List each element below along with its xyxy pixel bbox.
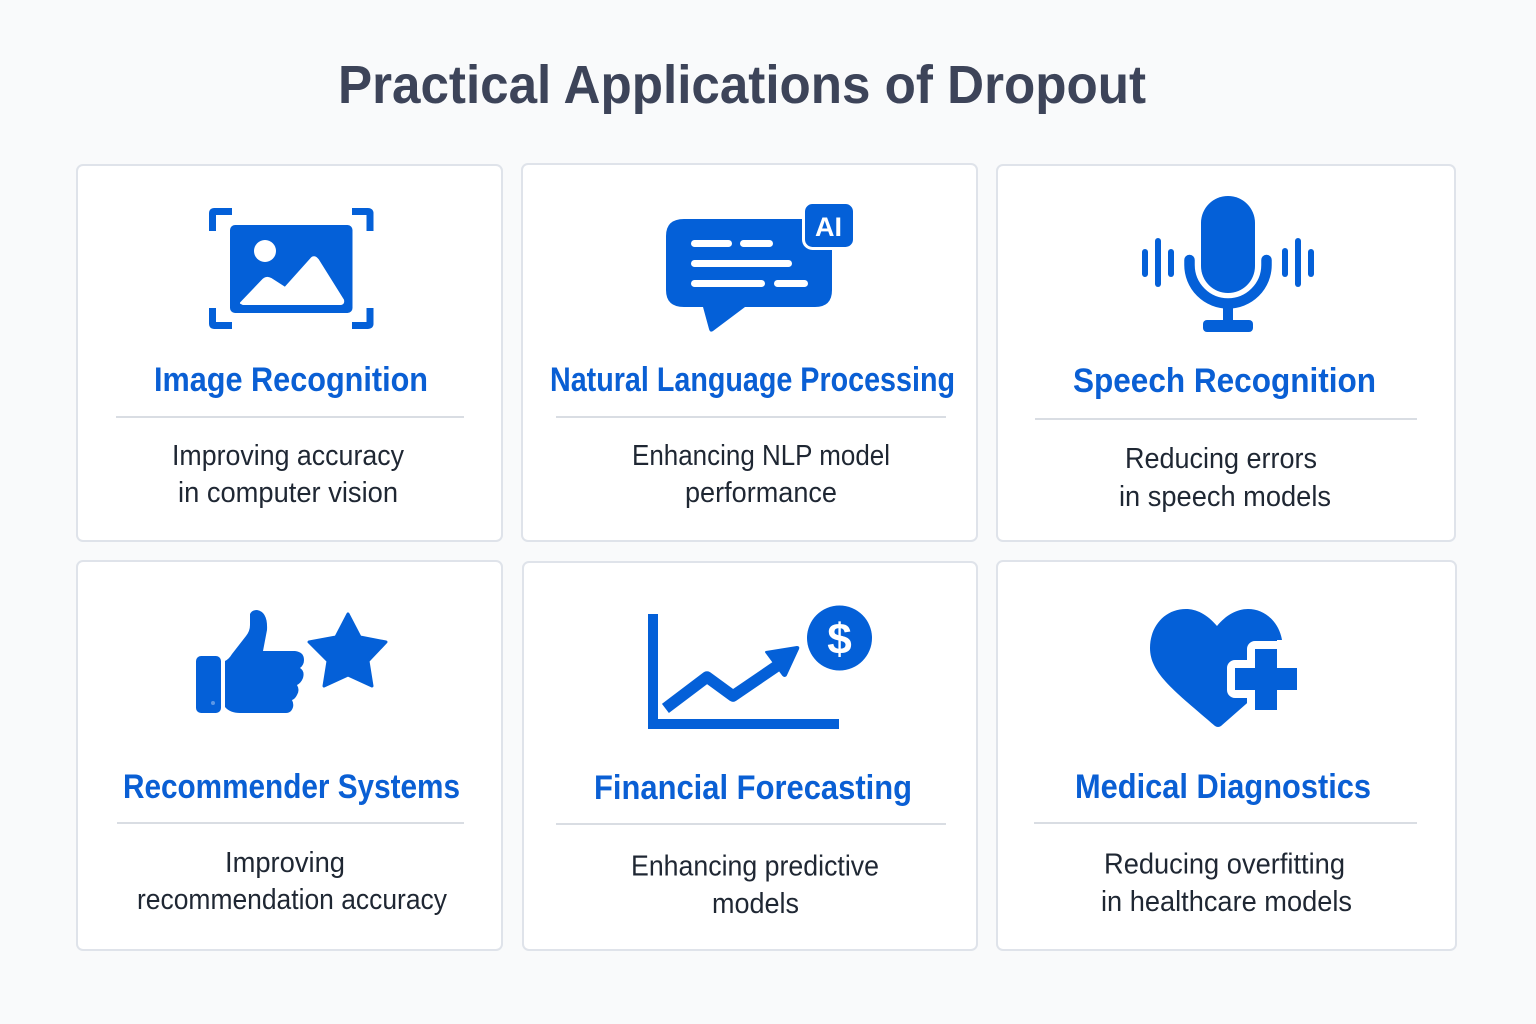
icon: thumbs up and star (196, 610, 386, 713)
icon: framed image (212, 212, 370, 326)
description: models (712, 888, 799, 920)
description: Improving (225, 847, 345, 879)
heading: Image Recognition (154, 361, 428, 399)
heading: Financial Forecasting (594, 769, 912, 807)
description: recommendation accuracy (137, 884, 447, 916)
icon: chat bubble with AI badge (666, 202, 854, 332)
heading: Speech Recognition (1073, 362, 1376, 400)
panel: recommender systems (77, 561, 502, 950)
description (172, 440, 404, 509)
icon: heart with plus (1150, 609, 1307, 727)
panel: image recognition (77, 165, 502, 541)
icon: growth chart with dollar (648, 606, 872, 729)
description: Improving accuracy (172, 440, 404, 472)
heading: Medical Diagnostics (1075, 768, 1371, 806)
panel: speech recognition (997, 165, 1455, 541)
panel: medical diagnostics (997, 561, 1456, 950)
heading: Recommender Systems (123, 768, 460, 806)
description (1101, 848, 1352, 918)
description: Enhancing NLP model (632, 440, 890, 472)
description (632, 440, 890, 509)
description: Reducing errors (1125, 443, 1317, 475)
icon: growth chart with dollar: $ (827, 615, 852, 664)
description: in computer vision (178, 477, 398, 509)
icon: microphone (1142, 196, 1314, 332)
panel: financial forecasting (523, 562, 977, 950)
heading: Natural Language Processing (550, 361, 955, 399)
description: in speech models (1119, 481, 1331, 513)
description: Enhancing predictive (631, 850, 879, 882)
description: in healthcare models (1101, 886, 1352, 918)
description (631, 850, 879, 920)
description (1119, 443, 1331, 513)
title: Practical Applications of Dropout (338, 55, 1146, 115)
description (137, 847, 447, 916)
icon: chat bubble with AI badge: AI (815, 212, 842, 242)
description: Reducing overfitting (1104, 848, 1345, 880)
panel: natural language processing (522, 164, 977, 541)
description: performance (685, 477, 837, 509)
